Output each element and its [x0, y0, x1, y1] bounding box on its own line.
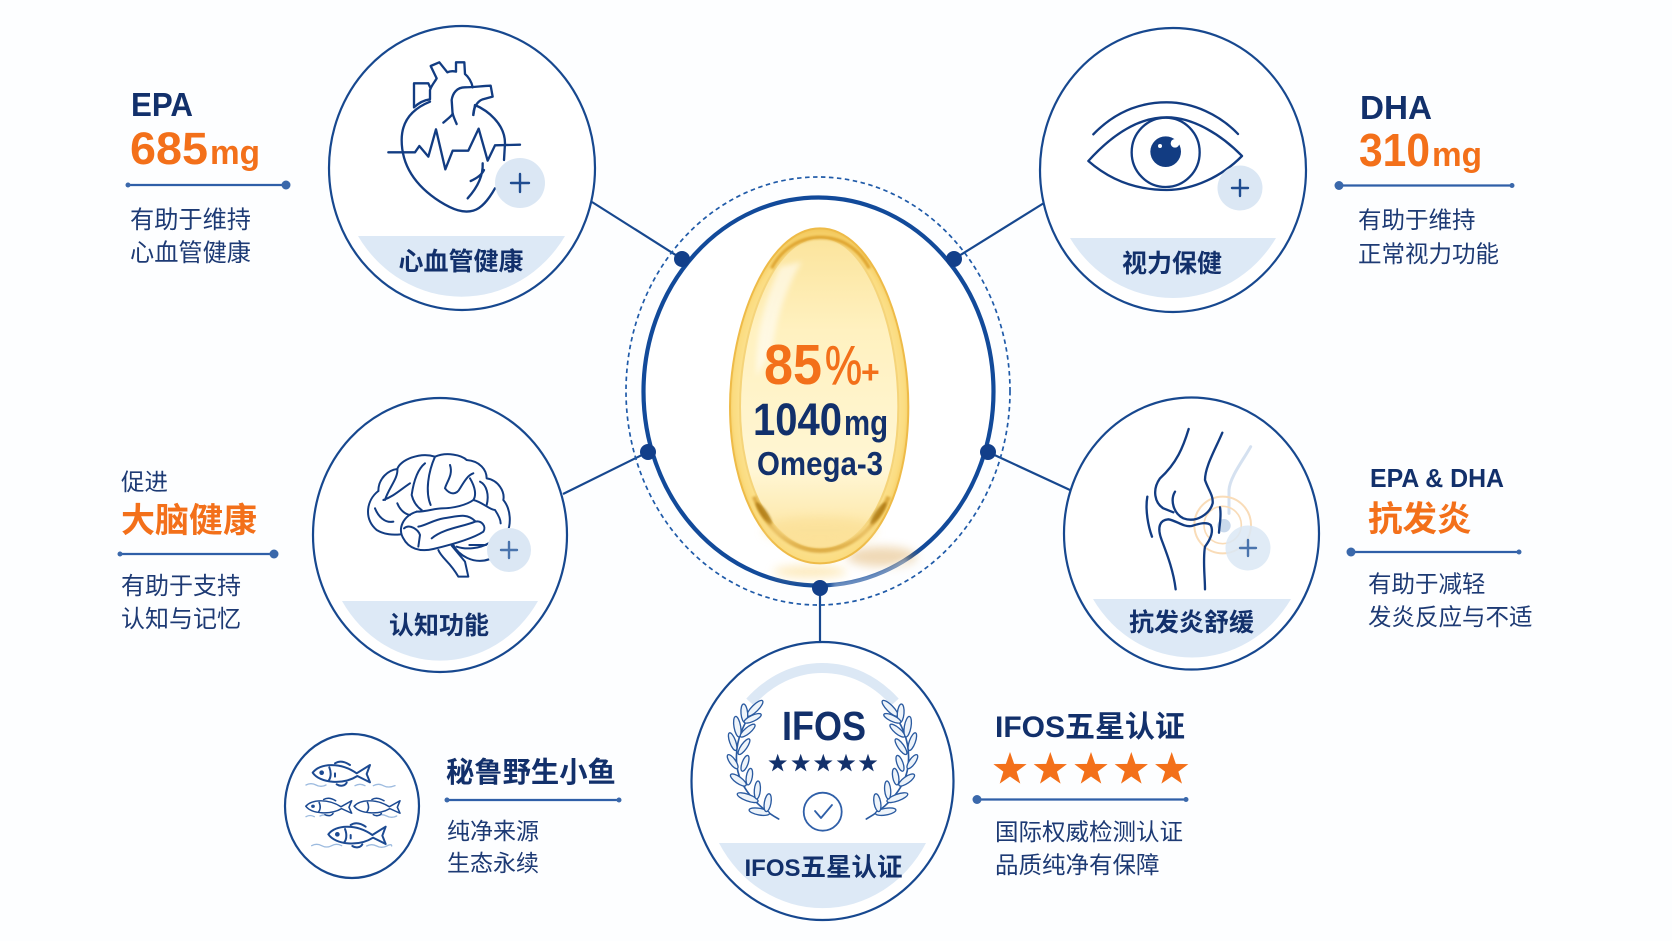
- text block: anti-inflammation: 发炎反应与不适: [1368, 604, 1532, 630]
- label band: [719, 843, 926, 908]
- capsule text: mg: [844, 402, 888, 443]
- panel: eye circle: [1040, 28, 1306, 312]
- waves: [306, 784, 397, 847]
- text block: EPA: mg: [210, 134, 260, 172]
- five orange stars: [993, 752, 1188, 784]
- capsule text: +: [861, 354, 880, 390]
- panel: joint circle: [1064, 398, 1319, 670]
- text block: IFOS certification: [972, 711, 1188, 878]
- text block: Peruvian wild small fish: 秘鲁野生小鱼: [446, 756, 616, 788]
- icon: left laurel: [725, 698, 779, 819]
- text block: anti-inflammation: EPA & DHA: [1370, 463, 1504, 493]
- capsule text: Omega-3: [757, 446, 883, 483]
- text block: Peruvian wild small fish: [444, 756, 622, 876]
- text block: EPA: 685: [130, 123, 208, 174]
- panel: heart circle: [329, 26, 595, 310]
- text block: IFOS certification: 国际权威检测认证: [995, 819, 1183, 845]
- icon: knee joint: [1147, 429, 1251, 589]
- label: 心血管健康: [398, 248, 524, 276]
- icon: plus badge: [495, 158, 545, 208]
- text block: DHA: 有助于维持: [1358, 207, 1476, 233]
- text block: EPA: EPA: [131, 87, 193, 124]
- text block: IFOS certification: IFOS五星认证: [995, 711, 1185, 744]
- five navy stars: [768, 754, 877, 771]
- arc decoration: [750, 668, 895, 702]
- label band: [358, 236, 565, 297]
- text block: brain health: [118, 469, 278, 633]
- dashed outer ring: [626, 177, 1010, 605]
- label band: [342, 601, 538, 661]
- capsule text: %: [825, 334, 862, 396]
- text block: brain health: 大脑健康: [121, 502, 257, 540]
- text block: Peruvian wild small fish: 纯净来源: [447, 818, 539, 844]
- icon: check seal: [804, 793, 842, 831]
- label band: [1093, 599, 1291, 657]
- icon: plus badge: [487, 528, 531, 572]
- text block: EPA: 有助于维持: [130, 207, 251, 234]
- capsule text: 85: [764, 333, 822, 397]
- text block: EPA: 心血管健康: [130, 240, 251, 267]
- text block: anti-inflammation: 抗发炎: [1368, 501, 1472, 539]
- text block: DHA: 正常视力功能: [1358, 241, 1499, 267]
- label: 认知功能: [389, 612, 489, 640]
- panel: fish circle: [285, 734, 419, 878]
- icon: heart with ECG: [388, 62, 520, 212]
- solid inner ring: [644, 198, 994, 586]
- text block: DHA: [1334, 90, 1514, 267]
- IFOS wordmark: IFOS: [782, 703, 866, 749]
- text block: brain health: 有助于支持: [121, 573, 241, 600]
- panel: IFOS badge circle: [692, 642, 954, 920]
- text block: anti-inflammation: 有助于减轻: [1368, 571, 1486, 597]
- icon: brain: [368, 454, 510, 577]
- faded ring reflection: [832, 560, 908, 586]
- central ring with capsule: [626, 177, 1010, 605]
- label: 视力保健: [1122, 250, 1222, 278]
- icon: eye: [1088, 102, 1242, 190]
- label: IFOS五星认证: [744, 854, 903, 882]
- text block: DHA: 310: [1359, 124, 1430, 176]
- capsule text: [753, 333, 888, 483]
- text block: Peruvian wild small fish: 生态永续: [447, 850, 539, 876]
- panel: brain circle: [313, 398, 567, 672]
- text block: DHA: mg: [1432, 136, 1482, 174]
- connector lines: [563, 202, 1070, 644]
- icon: right laurel: [866, 698, 920, 819]
- text block: EPA: [126, 87, 290, 267]
- ring nodes: [640, 251, 996, 596]
- icon: plus badge: [1226, 526, 1270, 570]
- icon: fish school: [306, 762, 400, 847]
- text block: anti-inflammation: [1346, 463, 1532, 630]
- text block: DHA: DHA: [1360, 90, 1432, 127]
- text block: IFOS certification: 品质纯净有保障: [995, 852, 1160, 878]
- label band: [1070, 238, 1276, 298]
- text block: brain health: 促进: [121, 469, 168, 495]
- capsule text: 1040: [753, 394, 842, 445]
- icon: plus badge: [1218, 166, 1262, 210]
- capsule: [730, 228, 917, 578]
- text block: brain health: 认知与记忆: [121, 606, 241, 633]
- label: 抗发炎舒缓: [1129, 608, 1254, 637]
